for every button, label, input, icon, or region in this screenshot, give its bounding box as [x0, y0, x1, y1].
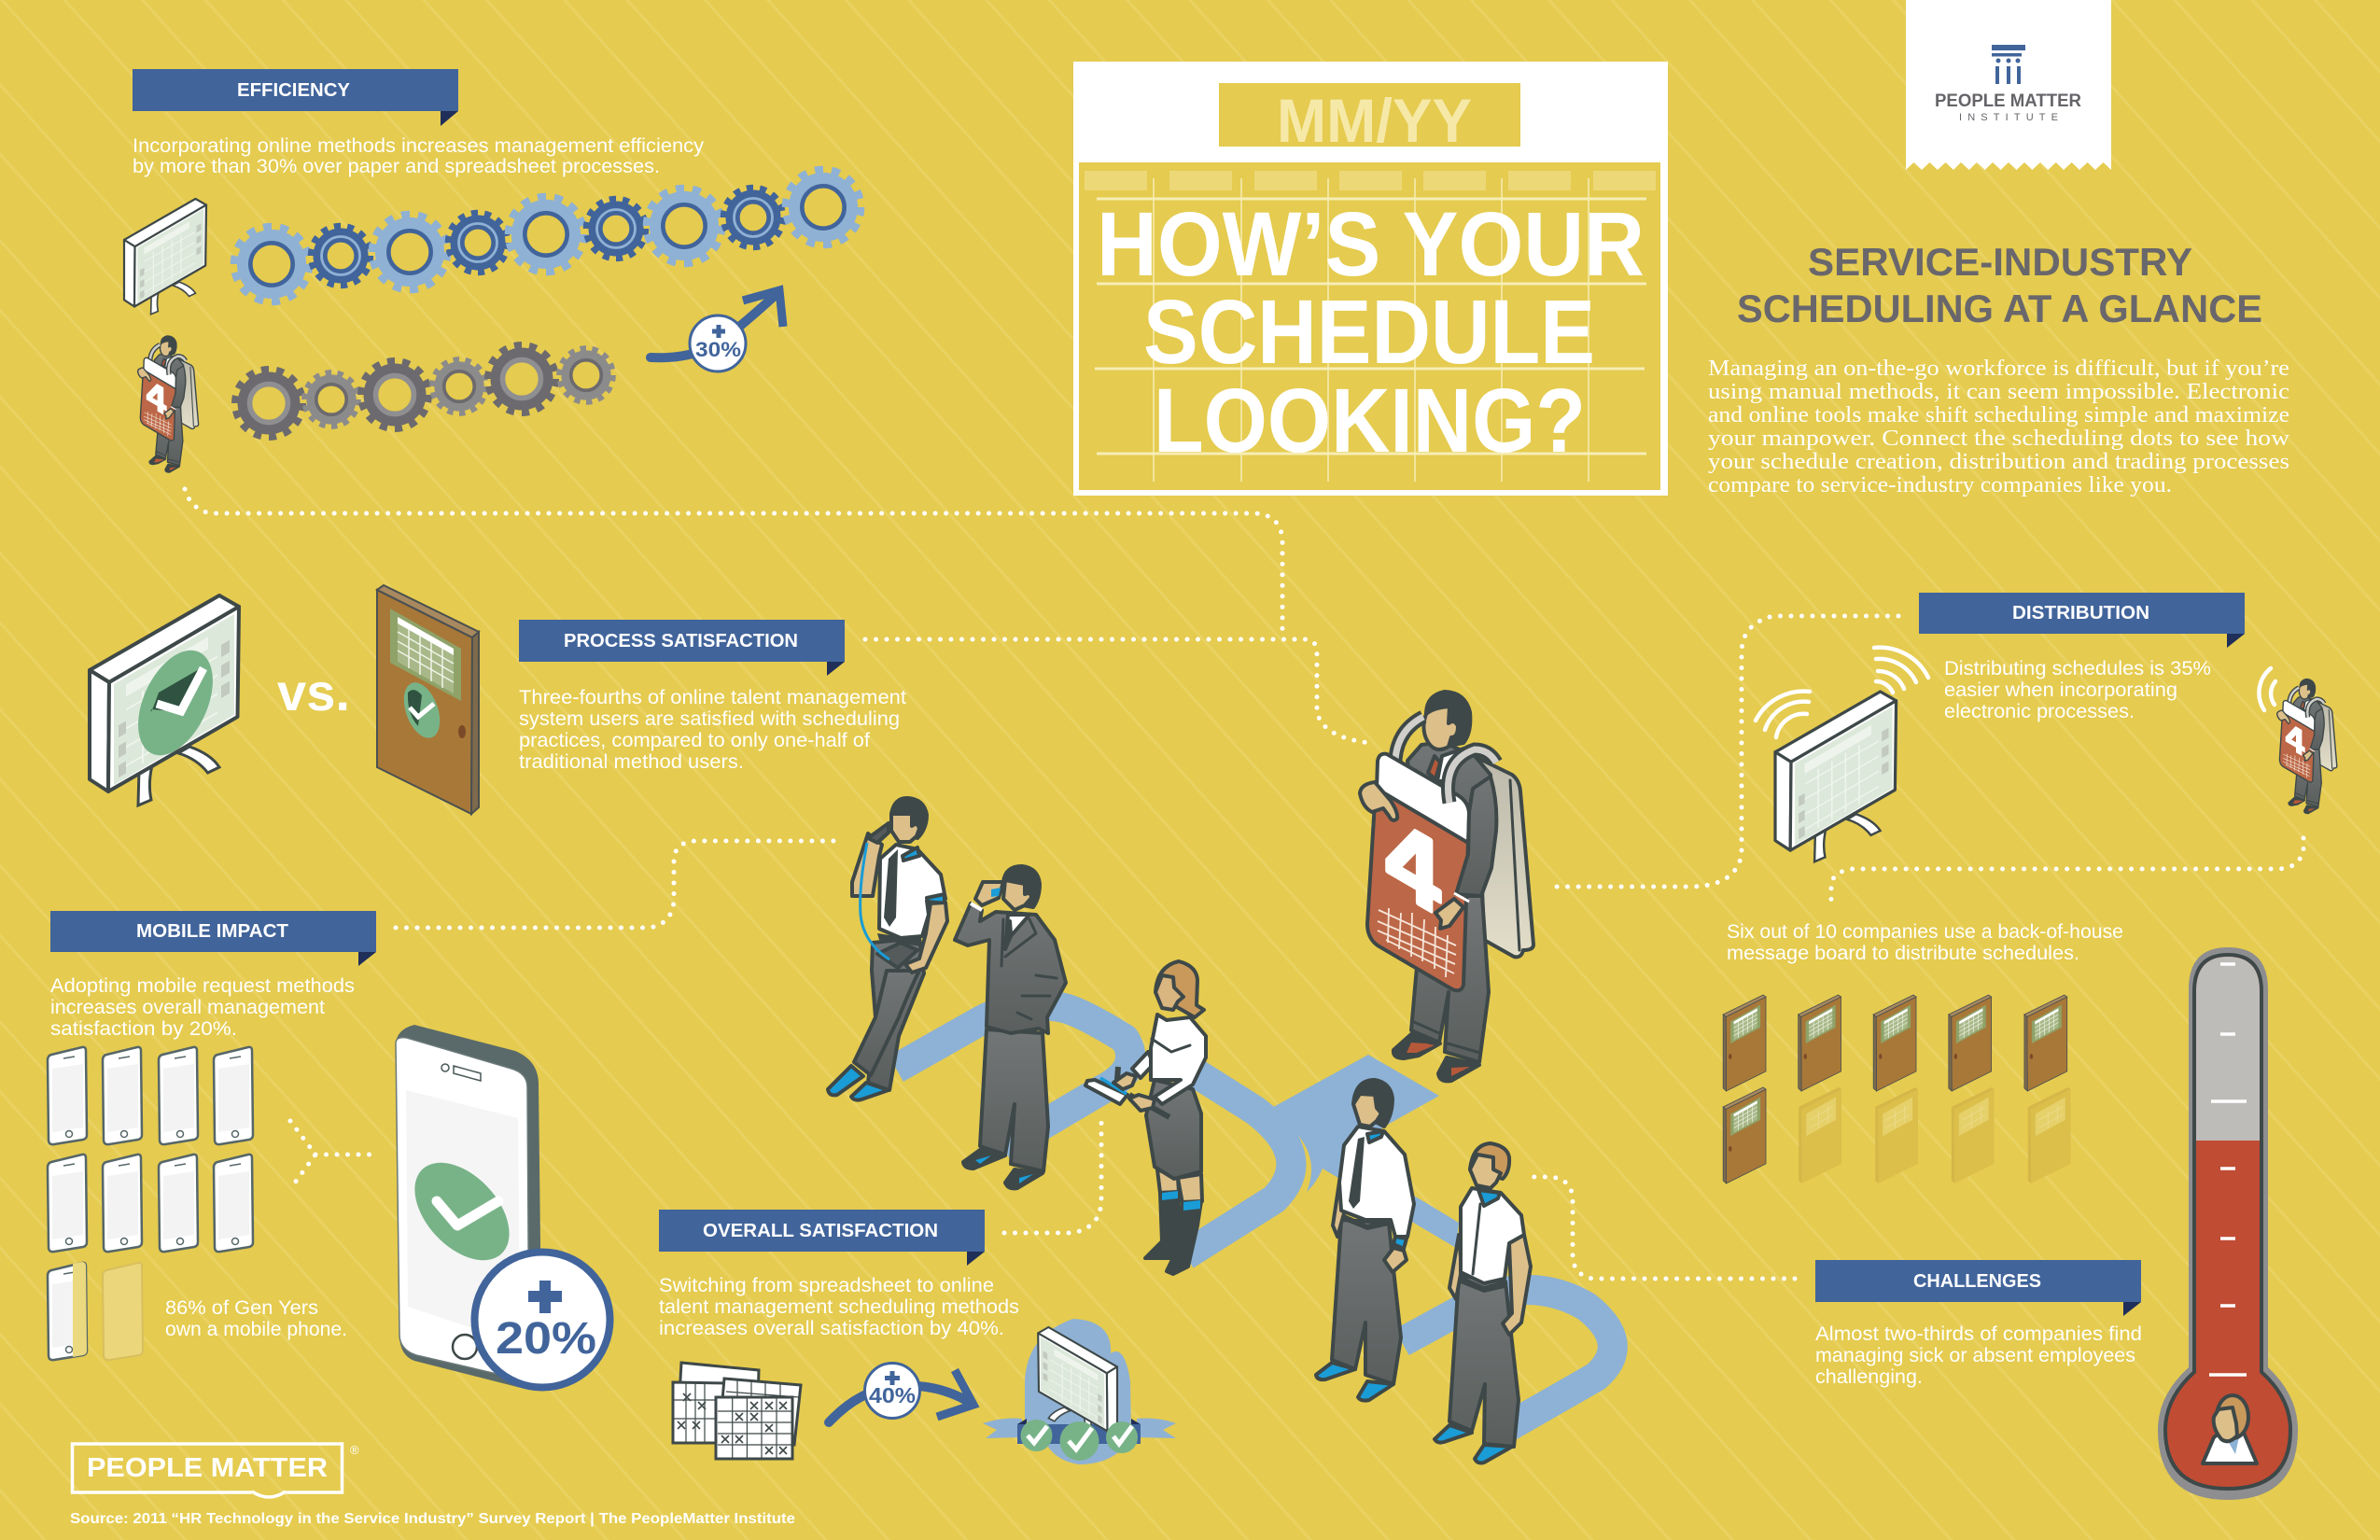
text: process satisfaction [519, 687, 906, 773]
text: mobile impact: Adopting mobile request methods [50, 975, 355, 997]
icon: small calendar man with signal [2259, 668, 2337, 814]
text: overall satisfaction: increases overall satisfaction by 40%. [659, 1318, 1004, 1339]
text: overall satisfaction: Switching from spreadsheet to online [659, 1275, 994, 1296]
intro paragraph: Managing an on-the-go workforce is difficult, but if you’re [1708, 357, 2289, 381]
text: message board: Six out of 10 companies use a back-of-house [1727, 921, 2123, 943]
banner: mobile impact [50, 911, 376, 966]
person: man with tie, standing [1316, 1080, 1414, 1401]
person: woman with notepad [1085, 961, 1206, 1274]
text: challenges: challenging. [1815, 1366, 1923, 1388]
title calendar panel: MM/YY [1277, 86, 1472, 155]
text: distribution [1944, 658, 2211, 722]
text: efficiency: Incorporating online methods increases management efficiency [133, 135, 705, 157]
person: man on phone with keypad [828, 798, 947, 1100]
banner: distribution: DISTRIBUTION [2012, 603, 2149, 623]
text: gen yers: own a mobile phone. [165, 1319, 347, 1340]
gray gears row [235, 345, 613, 437]
text: message board: message board to distribute schedules. [1727, 943, 2079, 964]
banner: process satisfaction [519, 620, 845, 676]
arrow with +30% badge: 30% [695, 338, 741, 361]
text: mobile impact [50, 975, 355, 1040]
text: mobile impact: satisfaction by 20%. [50, 1018, 237, 1040]
person: large man carrying calendar: 4 [1386, 792, 1440, 938]
text: challenges: managing sick or absent employees [1815, 1345, 2135, 1366]
text: challenges: Almost two-thirds of companies find [1815, 1323, 2142, 1345]
title calendar panel: SCHEDULE [1143, 281, 1595, 383]
heading: service-industry scheduling: SERVICE-INDUSTRY [1808, 240, 2192, 284]
text: distribution: Distributing schedules is 35% [1944, 658, 2211, 679]
intro paragraph: using manual methods, it can seem impossible. Electronic [1708, 380, 2289, 404]
intro paragraph: compare to service-industry companies like you. [1708, 473, 2172, 497]
heading: service-industry scheduling [1737, 240, 2262, 330]
icon: small calendar man with signal: 4 [2286, 715, 2304, 764]
large phone with check [396, 1025, 541, 1388]
text: process satisfaction: practices, compared to only one-half of [519, 730, 870, 751]
text: efficiency [133, 135, 705, 177]
arrow with +30% badge [651, 290, 783, 371]
banner: distribution [1919, 593, 2245, 648]
icon: small calendar man [138, 336, 199, 472]
arrow with +40% badge: 40% [869, 1383, 916, 1407]
intro paragraph: your schedule creation, distribution and trading processes [1708, 450, 2289, 474]
banner: mobile impact: MOBILE IMPACT [136, 921, 288, 942]
door pictogram: six of ten [1723, 995, 2071, 1183]
icon: large door [377, 585, 479, 814]
title calendar panel: LOOKING? [1154, 370, 1586, 471]
text: overall satisfaction [659, 1275, 1019, 1339]
text: overall satisfaction: talent management scheduling methods [659, 1296, 1019, 1318]
text: distribution: easier when incorporating [1944, 679, 2177, 701]
banner: challenges [1815, 1260, 2141, 1316]
heading: service-industry scheduling: SCHEDULING AT A GLANCE [1737, 287, 2262, 330]
banner: overall satisfaction: OVERALL SATISFACTION [703, 1221, 938, 1241]
logo tab: PeopleMatter Institute [1906, 0, 2111, 170]
icon: paper spreadsheets [673, 1363, 801, 1459]
arrow with +40% badge [829, 1363, 973, 1422]
text: distribution: electronic processes. [1944, 701, 2135, 722]
icon: small monitor [124, 199, 206, 315]
dotted connector lines [185, 489, 2303, 1279]
logo tab: PeopleMatter Institute: INSTITUTE [1959, 112, 2058, 123]
intro paragraph [1708, 357, 2290, 497]
intro paragraph: your manpower. Connect the scheduling dots to see how [1708, 427, 2290, 451]
icon: large monitor with check [90, 595, 239, 805]
floor path: blue route [896, 1005, 1613, 1435]
text: process satisfaction: traditional method users. [519, 751, 744, 773]
icon: award with monitor and checks [983, 1319, 1176, 1464]
text: message board [1727, 921, 2123, 964]
text: challenges [1815, 1323, 2142, 1388]
text: efficiency: by more than 30% over paper and spreadsheet processes. [133, 156, 660, 177]
badge: +20%: 20% [496, 1314, 596, 1364]
blue gears row [234, 170, 861, 301]
person: man with short sleeves, standing [1435, 1143, 1531, 1463]
text: gen yers [165, 1297, 347, 1340]
logo: PeopleMatter [73, 1443, 359, 1497]
text: process satisfaction: Three-fourths of online talent management [519, 687, 906, 708]
text: mobile impact: increases overall management [50, 997, 325, 1018]
icon: monitor with wifi signals [1756, 648, 1928, 861]
banner: process satisfaction: PROCESS SATISFACTION [564, 631, 798, 651]
banner: overall satisfaction [659, 1210, 985, 1266]
person: large man carrying calendar [1360, 692, 1533, 1081]
title calendar panel [1073, 62, 1668, 496]
thermometer [2158, 947, 2298, 1500]
person: man in suit on phone [955, 866, 1066, 1188]
intro paragraph: and online tools make shift scheduling simple and maximize [1708, 403, 2289, 427]
logo: PeopleMatter: PEOPLE MATTER [87, 1453, 328, 1483]
banner: efficiency [133, 69, 458, 126]
logo: PeopleMatter: ® [350, 1443, 359, 1457]
title calendar panel: HOW’S YOUR [1097, 193, 1645, 295]
text: gen yers: 86% of Gen Yers [165, 1297, 318, 1319]
text: vs.: vs. [277, 663, 350, 721]
badge: +20% [474, 1253, 610, 1387]
icon: small calendar man: 4 [147, 371, 167, 424]
logo tab: PeopleMatter Institute: PEOPLE MATTER [1935, 91, 2081, 111]
banner: challenges: CHALLENGES [1913, 1271, 2041, 1292]
source line: Source: 2011 “HR Technology in the Service Industry” Survey Report | The PeopleMatter Institute [70, 1511, 795, 1527]
text: process satisfaction: system users are satisfied with scheduling [519, 708, 900, 730]
banner: efficiency: EFFICIENCY [237, 80, 351, 101]
small phones grid [48, 1047, 253, 1360]
